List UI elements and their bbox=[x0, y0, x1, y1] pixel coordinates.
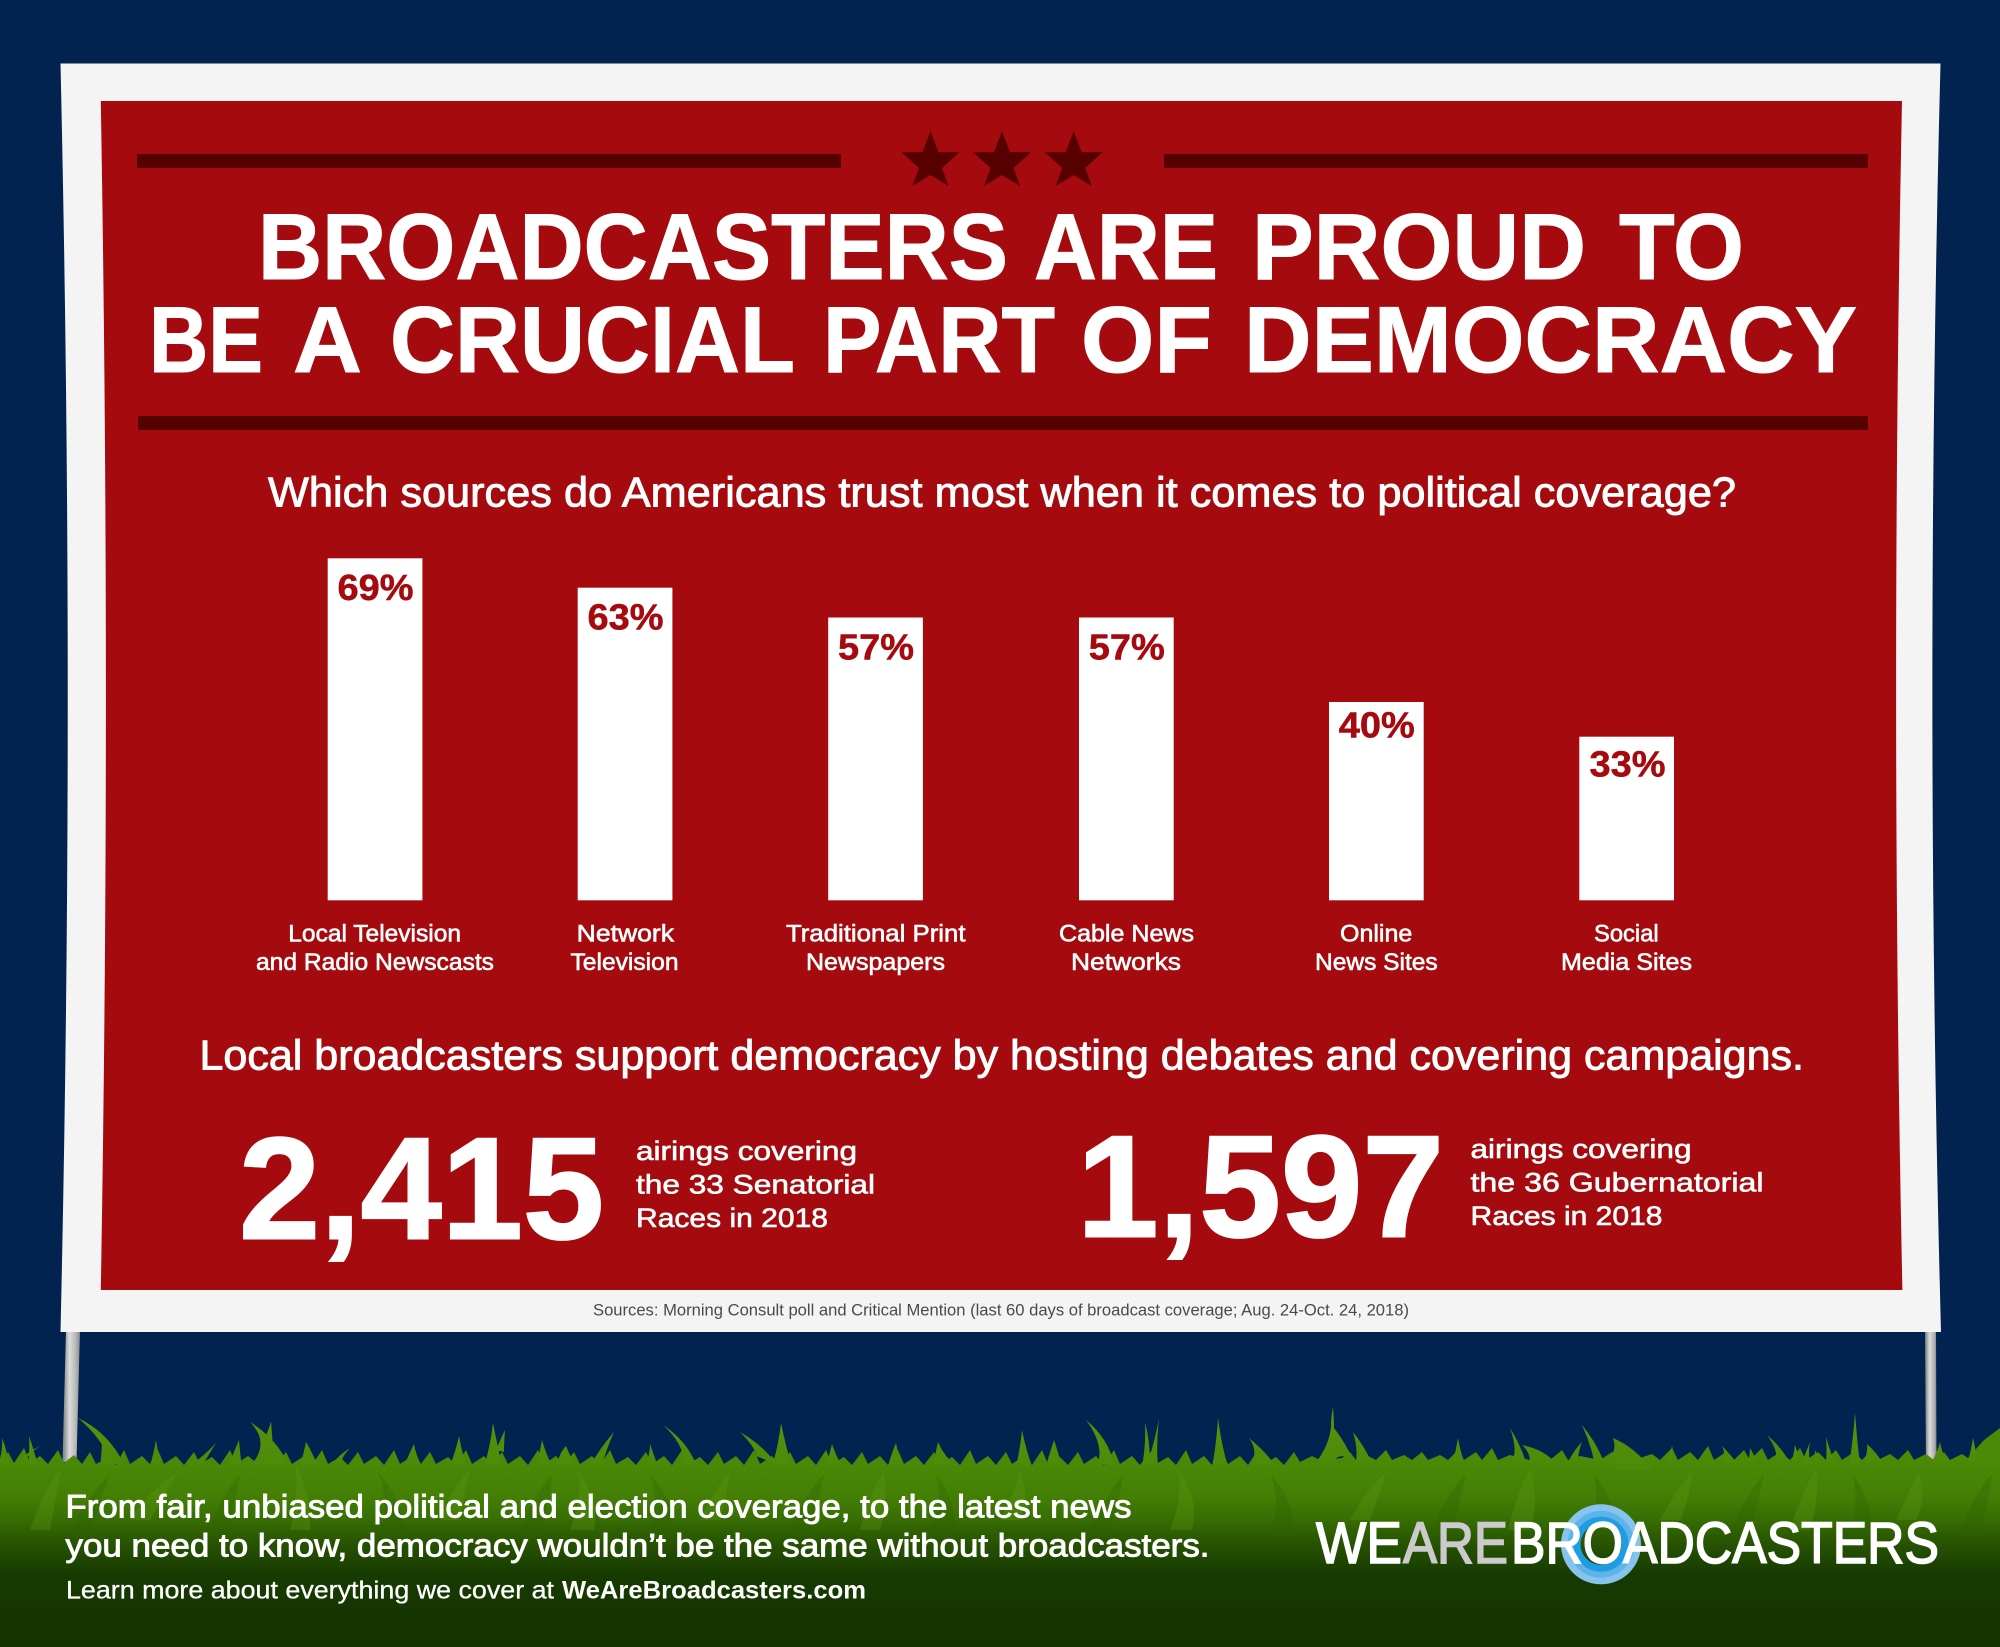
grass field bbox=[0, 1407, 2000, 1647]
bar: Online News Sites: News Sites bbox=[1315, 949, 1438, 976]
logo wordmark: ARE bbox=[1403, 1511, 1508, 1576]
title: PART bbox=[823, 287, 1055, 392]
title: BE bbox=[149, 287, 263, 392]
title: ARE bbox=[1034, 194, 1218, 299]
stat: senatorial airings: Races in 2018 bbox=[636, 1203, 828, 1233]
bar: Local Television and Radio Newscasts: and Radio Newscasts bbox=[256, 949, 494, 976]
bar: Online News Sites bbox=[1315, 702, 1438, 976]
stat: senatorial airings bbox=[239, 1108, 875, 1270]
bar: Traditional Print Newspapers: Traditional Print bbox=[786, 920, 966, 947]
title: TO bbox=[1619, 194, 1744, 299]
bar: Network Television: Television bbox=[570, 949, 678, 976]
bar: Traditional Print Newspapers: Newspapers bbox=[806, 949, 945, 976]
stat: gubernatorial airings bbox=[1077, 1106, 1764, 1268]
title: DEMOCRACY bbox=[1244, 287, 1857, 392]
bar: Social Media Sites: Media Sites bbox=[1561, 949, 1692, 976]
bar: Local Television and Radio Newscasts: 69% bbox=[338, 567, 414, 608]
bar: Network Television: 63% bbox=[588, 596, 664, 637]
bar chart bbox=[256, 558, 1692, 976]
bar: Local Television and Radio Newscasts bbox=[256, 558, 494, 976]
bar: Network Television bbox=[570, 588, 678, 976]
grass base with jagged top edge bbox=[0, 1428, 2000, 1647]
bar: Online News Sites: Online bbox=[1340, 920, 1412, 947]
bar: Social Media Sites: 33% bbox=[1590, 744, 1666, 785]
closing message bbox=[66, 1488, 1210, 1604]
stat: senatorial airings: airings covering bbox=[636, 1136, 857, 1166]
right sign post bbox=[1925, 1330, 1936, 1464]
closing message: From fair, unbiased political and election coverage, to the latest news bbox=[66, 1488, 1132, 1524]
closing message: Learn more about everything we cover at bbox=[66, 1576, 554, 1604]
darker blades inside the grass bbox=[70, 1472, 1992, 1535]
title: A bbox=[293, 287, 362, 392]
closing message: you need to know, democracy wouldn’t be the same without broadcasters. bbox=[66, 1528, 1210, 1564]
bar: Cable News Networks: 57% bbox=[1089, 626, 1165, 668]
stat: gubernatorial airings: 1,597 bbox=[1077, 1106, 1444, 1268]
stat: senatorial airings: 2,415 bbox=[239, 1108, 604, 1270]
logo wordmark bbox=[1316, 1511, 1939, 1576]
logo signal rings bbox=[1564, 1508, 1638, 1581]
bar: Local Television and Radio Newscasts: Local Television bbox=[288, 920, 461, 947]
title: BROADCASTERS bbox=[258, 194, 1008, 299]
bar: Traditional Print Newspapers bbox=[786, 618, 966, 976]
logo wordmark: BROADCASTERS bbox=[1511, 1511, 1939, 1576]
stat: gubernatorial airings: the 36 Gubernatorial bbox=[1470, 1168, 1764, 1198]
WeAreBroadcasters logo bbox=[1316, 1508, 1939, 1581]
bar: Social Media Sites bbox=[1561, 737, 1692, 976]
title: PROUD bbox=[1252, 194, 1586, 299]
stat: gubernatorial airings: Races in 2018 bbox=[1470, 1201, 1662, 1231]
secondary heading: Local broadcasters support democracy by hosting debates and covering campaigns. bbox=[200, 1031, 1804, 1078]
title: CRUCIAL bbox=[390, 287, 795, 392]
chart heading: Which sources do Americans trust most when it comes to political coverage? bbox=[268, 469, 1736, 516]
bar: Cable News Networks: Cable News bbox=[1059, 920, 1194, 947]
title: OF bbox=[1081, 287, 1212, 392]
sources note: Sources: Morning Consult poll and Critical Mention (last 60 days of broadcast coverage; Aug. 24-Oct. 24, 2018) bbox=[593, 1302, 1409, 1320]
bar: Network Television: Network bbox=[577, 920, 675, 947]
title bbox=[149, 194, 1857, 392]
title rule bbox=[138, 416, 1868, 430]
sign board bbox=[60, 64, 1941, 1332]
header rule left bbox=[137, 154, 841, 168]
stat: senatorial airings: the 33 Senatorial bbox=[636, 1169, 875, 1199]
three stars bbox=[902, 131, 1103, 186]
red sign panel bbox=[101, 101, 1902, 1290]
yard sign bbox=[60, 64, 1941, 1332]
bar: Cable News Networks bbox=[1059, 618, 1194, 976]
bar: Online News Sites: 40% bbox=[1339, 704, 1415, 745]
left sign post bbox=[62, 1330, 80, 1462]
bar: Cable News Networks: Networks bbox=[1071, 949, 1181, 976]
lighter blades inside the grass bbox=[30, 1466, 1923, 1530]
bar: Social Media Sites: Social bbox=[1594, 920, 1659, 947]
bar: Traditional Print Newspapers: 57% bbox=[838, 626, 914, 668]
logo wordmark: WE bbox=[1316, 1511, 1402, 1576]
closing message: WeAreBroadcasters.com bbox=[562, 1576, 866, 1604]
stat: gubernatorial airings: airings covering bbox=[1470, 1134, 1692, 1164]
header rule right bbox=[1164, 154, 1868, 168]
tall grass blades bbox=[0, 1407, 1977, 1470]
